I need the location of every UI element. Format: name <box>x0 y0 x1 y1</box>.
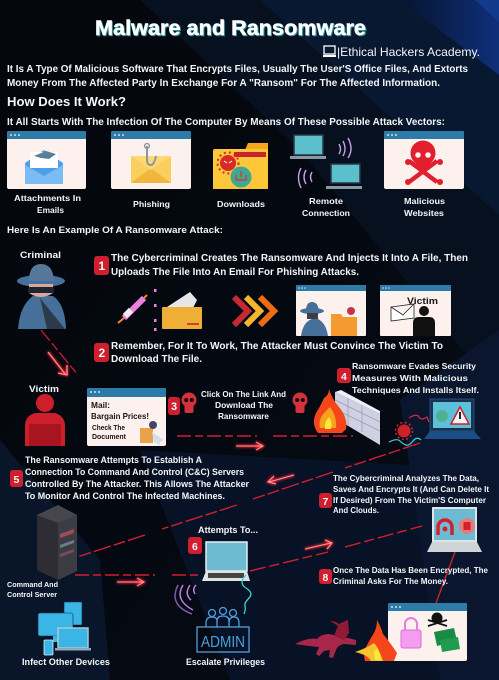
step 2 <box>94 341 443 365</box>
window: victim receiving email <box>380 285 451 336</box>
icon: downloads folder <box>213 143 268 189</box>
step 4: 4 <box>341 371 347 383</box>
arrow: up right <box>305 540 332 549</box>
icon: attachments in emails <box>7 131 86 189</box>
step 8: 8 <box>322 572 328 584</box>
window: ransom demand <box>388 603 467 661</box>
icon: encrypted laptop <box>427 507 482 552</box>
icon: virus with squiggles <box>389 415 429 445</box>
intro paragraph <box>7 64 468 89</box>
label: infect other devices: Infect Other Devices <box>22 657 110 668</box>
heading: ransomware attack example: Here Is An Example Of A Ransomware Attack: <box>7 225 223 236</box>
intro paragraph: Money From The Affected Party In Exchange For A "Ransom" For The Affected Information. <box>7 78 440 89</box>
step 2: Remember, For It To Work, The Attacker Must Convince The Victim To <box>111 341 443 352</box>
title: Malware and Ransomware <box>95 16 366 40</box>
label: command and control server <box>7 582 58 599</box>
arrow: to command server <box>268 475 294 484</box>
step 7: The Cybercriminal Analyzes The Data, <box>333 473 479 483</box>
icon: cyan squiggle <box>242 575 251 614</box>
window: victim receiving email: Victim <box>407 296 438 307</box>
window: mail message: Document <box>92 434 127 441</box>
step 8: Criminal Asks For The Money. <box>333 576 448 586</box>
icon: wifi waves <box>175 585 196 614</box>
icon: phishing <box>111 131 191 189</box>
icon: admin group <box>197 608 249 652</box>
icon: firewall with flame <box>314 389 380 445</box>
icon: dragon <box>295 620 356 658</box>
step 3 <box>168 397 180 415</box>
icon: chevrons <box>234 297 274 325</box>
step 2: 2 <box>98 346 106 360</box>
step 3: 3 <box>171 401 177 413</box>
icon labels: Websites <box>404 208 444 218</box>
step 5: To Monitor And Control The Infected Machines. <box>25 491 225 501</box>
dashed line: mail to firewall <box>177 435 353 437</box>
step 7: If Desired) From The Victim'S Computer <box>333 495 487 505</box>
step 7: And Clouds. <box>333 505 379 515</box>
line: laptop to payment window <box>436 552 455 603</box>
window: mail message <box>87 388 166 446</box>
icon labels: Malicious <box>404 196 445 206</box>
label: criminal: Criminal <box>20 250 61 261</box>
window: mail message: Bargain Prices! <box>91 411 149 421</box>
icon labels: Emails <box>37 205 64 215</box>
label: victim: Victim <box>29 384 59 395</box>
step 1: Uploads The File Into An Email For Phishing Attacks. <box>111 267 359 278</box>
title: Malware and Ransomware <box>96 17 367 41</box>
window: mail message: Mail: <box>91 400 110 410</box>
icon labels: Connection <box>302 208 350 218</box>
dashed line: laptop to encrypted laptop <box>250 526 422 571</box>
icon labels <box>14 193 445 218</box>
step 6 <box>188 537 202 554</box>
dashed line: server to laptop <box>75 574 202 576</box>
label: command and control server: Command And <box>7 582 58 589</box>
window: mail message: Check The <box>92 425 125 432</box>
step 5: The Ransomware Attempts To Establish A <box>25 455 203 465</box>
icon: malicious websites <box>384 131 464 189</box>
window: attacker with folder <box>296 285 366 336</box>
text: click the link <box>201 389 286 421</box>
step 6: 6 <box>192 541 198 553</box>
icon labels: Attachments In <box>14 193 81 203</box>
icon labels: Downloads <box>217 199 265 209</box>
icon: fire breath <box>355 620 397 661</box>
intro paragraph: It Is A Type Of Malicious Software That Encrypts Files, Usually The User'S Office Files, And Extorts <box>7 64 468 75</box>
heading: How Does It Work?: How Does It Work? <box>7 94 126 109</box>
step 8 <box>319 565 488 586</box>
step 4: Ransomware Evades Security <box>352 361 476 371</box>
attack vectors intro: It All Starts With The Infection Of The Computer By Means Of These Possible Attack Vectors: <box>7 117 445 128</box>
icon: folder with file <box>162 292 202 329</box>
icon: other devices <box>38 602 91 655</box>
icon: admin group: ADMIN <box>201 634 245 651</box>
step 7: Saves And Encrypts It (And Can Delete It <box>333 484 489 494</box>
label: command and control server: Control Server <box>7 592 57 599</box>
icon labels: Remote <box>309 196 343 206</box>
step 5 <box>10 455 250 501</box>
label: attempts to: Attempts To... <box>198 525 258 535</box>
step 4: Measures With Malicious <box>352 373 468 383</box>
icon: skull left <box>182 392 196 413</box>
icon: victim figure <box>25 394 65 446</box>
icon labels: Phishing <box>133 199 170 209</box>
arrow: right <box>236 442 263 450</box>
step 1: The Cybercriminal Creates The Ransomware And Injects It Into A File, Then <box>111 253 468 264</box>
step 5: Connection To Command And Control (C&C) Servers <box>25 467 244 477</box>
step 5: Controlled By The Attacker. This Allows The Attacker <box>25 479 250 489</box>
text: click the link: Ransomware <box>218 411 269 421</box>
arrow: right to laptop <box>117 578 144 586</box>
arrow: criminal to victim <box>41 330 78 375</box>
step 7: 7 <box>322 496 328 508</box>
step 1 <box>94 253 468 278</box>
icon: server rack <box>37 505 77 580</box>
icon: infected laptop <box>424 399 481 439</box>
step 4 <box>337 361 479 395</box>
text: click the link: Download The <box>215 400 273 410</box>
label: escalate privileges: Escalate Privileges <box>186 657 265 668</box>
icon: skull right <box>292 392 308 413</box>
icon: laptop <box>202 542 250 581</box>
icon: syringe <box>118 289 156 331</box>
step 2: Download The File. <box>111 354 202 365</box>
dashed line: laptop to server <box>77 443 420 557</box>
icon: remote connection <box>290 135 362 189</box>
step 8: Once The Data Has Been Encrypted, The <box>333 565 488 575</box>
text: click the link: Click On The Link And <box>201 389 286 399</box>
step 4: Techniques And Installs Itself. <box>352 385 479 395</box>
step 7 <box>319 473 489 515</box>
step 5: 5 <box>14 474 20 486</box>
icon: criminal figure <box>17 264 66 329</box>
step 1: 1 <box>98 259 106 273</box>
logo: Ethical Hackers Academy: |Ethical Hackers Academy. <box>337 45 480 59</box>
